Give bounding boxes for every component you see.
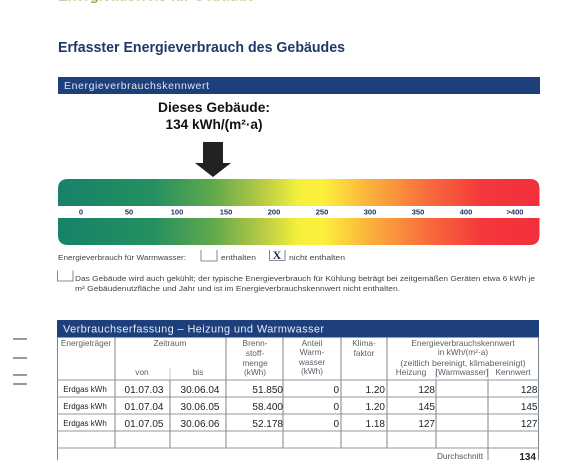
table column headers: faktor xyxy=(354,348,375,358)
table column headers: Warm- xyxy=(300,347,325,357)
row 1: 30.06.04 xyxy=(181,385,220,396)
row 2: 01.07.04 xyxy=(125,402,164,413)
scale labels: 0 xyxy=(79,208,83,216)
row 3: 127 xyxy=(521,419,538,430)
table column headers: (kWh) xyxy=(244,367,266,377)
table column headers: in kWh/(m²·a) xyxy=(438,347,488,357)
table column headers: menge xyxy=(242,358,268,368)
scale labels: 350 xyxy=(412,208,424,216)
scale labels: 200 xyxy=(268,208,280,216)
row 3: 30.06.06 xyxy=(181,419,220,430)
table column headers: Zeitraum xyxy=(154,338,186,348)
legend: hot water: enthalten xyxy=(221,253,256,262)
table column headers: stoff- xyxy=(246,348,264,358)
scale labels: 150 xyxy=(220,208,232,216)
average row xyxy=(437,451,536,460)
row 1: 51.850 xyxy=(252,385,283,396)
table column headers: Energieverbrauchskennwert xyxy=(411,338,515,348)
scale labels xyxy=(79,208,523,216)
row 3 xyxy=(63,419,538,430)
row 2: 58.400 xyxy=(252,402,283,413)
text block: cooling note: Das Gebäude wird auch gekühlt; der typische Energieverbrauch für Kühlung beträgt bei zeitgemäßen Geräten etwa 6 kWh je xyxy=(75,274,535,283)
table column headers: Heizung xyxy=(396,367,427,377)
icon: margin marks xyxy=(13,339,27,384)
row 2: 145 xyxy=(418,402,435,413)
row 2: 0 xyxy=(333,402,339,413)
row 1: 0 xyxy=(333,385,339,396)
scale labels: 300 xyxy=(364,208,376,216)
title: Erfasster Energieverbrauch des Gebäudes xyxy=(58,40,345,56)
row 1: 1.20 xyxy=(366,385,385,396)
table column headers: (kWh) xyxy=(301,366,323,376)
table column headers xyxy=(61,338,531,377)
panel: Energieverbrauchskennwert header: Energieverbrauchskennwert xyxy=(64,80,209,92)
icon: down arrow xyxy=(195,142,231,177)
scale labels: >400 xyxy=(507,208,523,216)
panel: consumption table xyxy=(57,320,539,460)
table column headers: Energieträger xyxy=(61,338,111,348)
table column headers: [Warmwasser] xyxy=(436,367,488,377)
row 1: 128 xyxy=(521,385,538,396)
table grid xyxy=(57,337,539,460)
row 3: 52.178 xyxy=(252,419,283,430)
row 1: Erdgas kWh xyxy=(63,385,107,394)
table heading: Verbrauchserfassung – Heizung und Warmwasser xyxy=(63,324,324,336)
panel: Energieverbrauchskennwert header xyxy=(58,77,540,94)
row 2 xyxy=(63,402,538,413)
row 3: 1.18 xyxy=(366,419,385,430)
row 3: 01.07.05 xyxy=(125,419,164,430)
legend: hot water: Energieverbrauch für Warmwasser: xyxy=(58,253,186,262)
text block: cooling note xyxy=(58,270,535,293)
upper gradient band xyxy=(58,179,540,206)
callout: this building value: 134 kWh/(m²·a) xyxy=(166,116,262,132)
table column headers: bis xyxy=(193,367,203,377)
row 1 xyxy=(63,385,538,396)
chart: energy scale bar xyxy=(58,179,540,245)
legend: hot water: X xyxy=(273,248,282,262)
row 2: 145 xyxy=(521,402,538,413)
table column headers: Anteil xyxy=(302,338,323,348)
table column headers: Klima- xyxy=(352,338,376,348)
row 2: Erdgas kWh xyxy=(63,402,107,411)
scale labels: 250 xyxy=(316,208,328,216)
row 1: 128 xyxy=(418,385,435,396)
callout: this building value xyxy=(158,99,270,132)
row 2: 30.06.05 xyxy=(181,402,220,413)
scale labels: 100 xyxy=(171,208,183,216)
row 2: 1.20 xyxy=(366,402,385,413)
legend: hot water: nicht enthalten xyxy=(289,253,345,262)
table column headers: (zeitlich bereinigt, klimabereinigt) xyxy=(400,358,526,368)
row 3: 0 xyxy=(333,419,339,430)
table column headers: von xyxy=(135,367,149,377)
legend: hot water xyxy=(58,248,345,262)
text block: cooling note: m² Gebäudenutzfläche und Jahr und ist im Energieverbrauchskennwert nicht enthalten. xyxy=(75,284,400,293)
table heading xyxy=(57,320,539,338)
scale labels: 50 xyxy=(125,208,133,216)
callout: this building value: Dieses Gebäude: xyxy=(158,99,270,115)
table column headers: wasser xyxy=(298,357,325,367)
table column headers: Brenn- xyxy=(243,338,268,348)
scale labels: 400 xyxy=(460,208,472,216)
row 3: Erdgas kWh xyxy=(63,419,107,428)
row 3: 127 xyxy=(418,419,435,430)
lower gradient band xyxy=(58,218,540,245)
table column headers: Kennwert xyxy=(495,367,531,377)
row 1: 01.07.03 xyxy=(125,385,164,396)
